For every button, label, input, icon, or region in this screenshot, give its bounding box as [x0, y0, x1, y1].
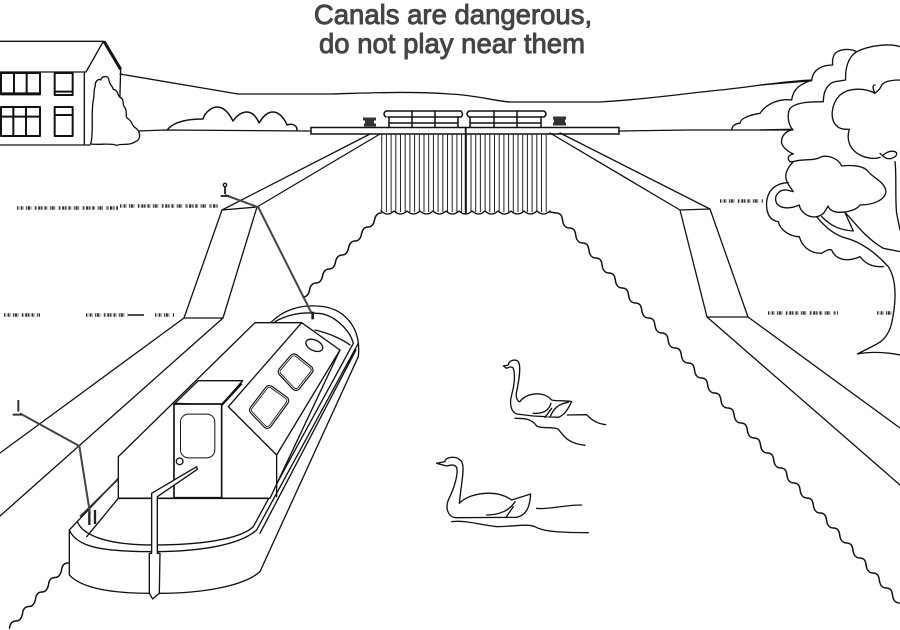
upper right window [55, 73, 73, 95]
stern mooring rope [20, 413, 90, 513]
hill line on horizon [120, 74, 811, 102]
bush beside house [91, 77, 140, 145]
far bank horizon line [138, 130, 793, 131]
roof hatch [175, 381, 243, 405]
swans and ripples [437, 360, 606, 533]
cabin door [174, 404, 222, 498]
stern mooring stake [13, 400, 22, 415]
title: do not play near them [319, 28, 585, 59]
cabin [118, 323, 340, 498]
upper swan [503, 360, 572, 417]
porthole [304, 337, 325, 354]
side window 1 [254, 390, 284, 424]
gunwale [69, 313, 358, 552]
side window 2 [283, 358, 309, 386]
grass tufts [4, 201, 892, 315]
lower left window [0, 107, 40, 136]
canal left bank upper [303, 213, 381, 297]
door knob [176, 458, 183, 465]
house [0, 41, 140, 145]
right paddle gear [553, 118, 566, 124]
lock bridge [311, 128, 619, 134]
upper swan ripples [515, 415, 606, 445]
canal left bank lower [10, 563, 68, 628]
door window [182, 415, 214, 457]
tree [732, 45, 900, 355]
stern mooring cleat [89, 509, 95, 525]
bush on far bank [168, 107, 297, 130]
canal right bank [550, 212, 899, 603]
bow mooring stake and rope [221, 183, 313, 319]
hull [69, 306, 359, 593]
lock gate balance rails [384, 111, 546, 127]
right lock wall [550, 133, 900, 485]
lower right window [55, 107, 73, 136]
upper left window [0, 73, 40, 94]
lower swan [437, 457, 531, 518]
left paddle gear [363, 119, 376, 125]
narrowboat [13, 306, 359, 599]
title [314, 0, 592, 59]
left lock wall [0, 134, 380, 516]
tiller and rudder [149, 467, 197, 599]
lower swan ripples [452, 505, 588, 533]
side rail [80, 480, 117, 517]
lock gates [381, 128, 550, 214]
